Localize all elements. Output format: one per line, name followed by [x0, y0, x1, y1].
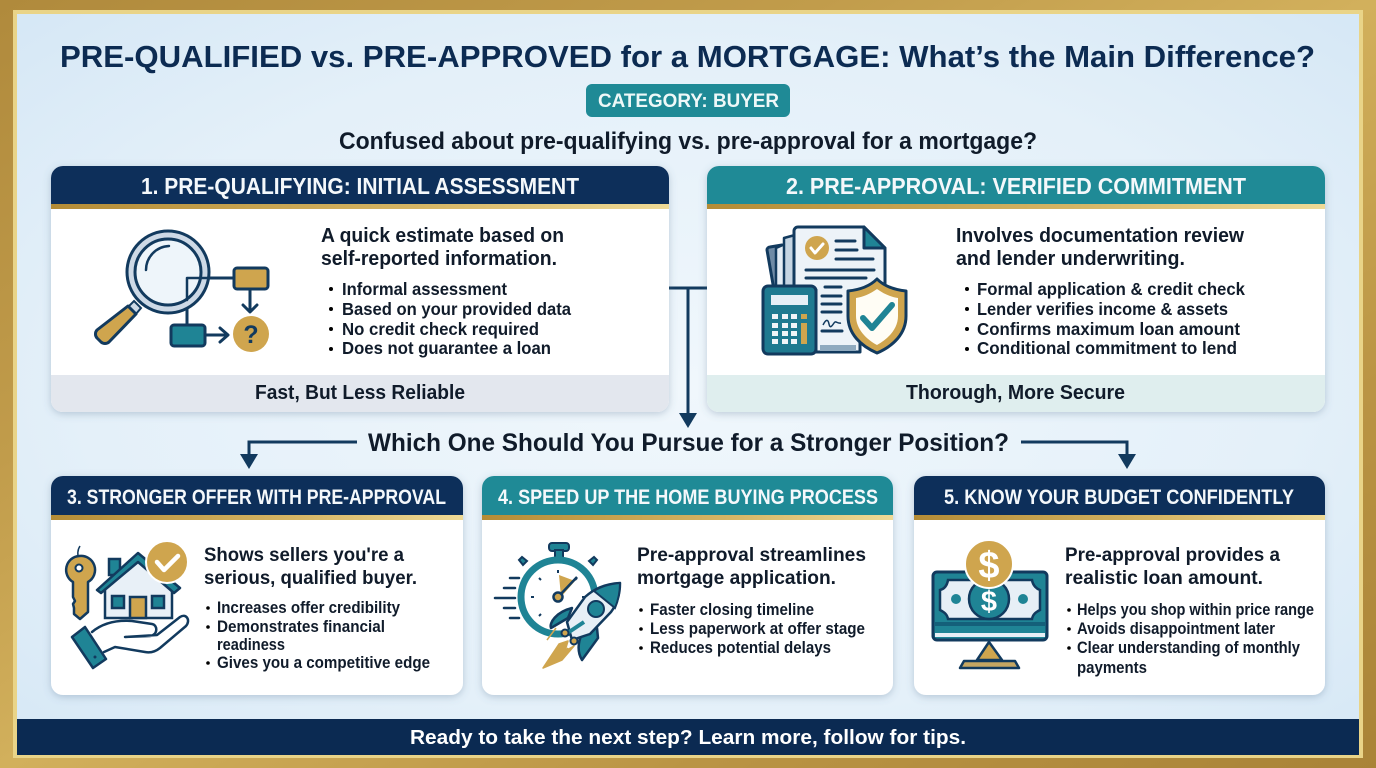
panel 1 footer: Fast, But Less Reliable — [255, 382, 465, 404]
section question: Which One Should You Pursue for a Stronger Position? — [368, 429, 1009, 457]
panel 4 text: Faster closing timeline — [650, 601, 814, 619]
panel 5 text: Avoids disappointment later — [1077, 620, 1276, 638]
icon: money monitor and coin — [933, 540, 1047, 668]
icon: stopwatch and rocket — [495, 543, 620, 668]
panel 3 text — [204, 545, 430, 672]
icon: money monitor and coin: $ — [981, 586, 997, 618]
panel 3 text: Increases offer credibility — [217, 599, 401, 617]
panel 2 text: Conditional commitment to lend — [977, 338, 1237, 358]
icon: key, house and hand — [66, 541, 188, 668]
panel: stronger offer — [51, 476, 463, 695]
arrow: left branch — [240, 442, 357, 469]
title: PRE-QUALIFIED vs. PRE-APPROVED for a MORTGAGE: What’s the Main Difference? — [60, 39, 1315, 74]
panel: know your budget — [914, 476, 1325, 695]
panel 1 header: 1. PRE-QUALIFYING: INITIAL ASSESSMENT — [141, 173, 579, 199]
icon: magnifier with flowchart: ? — [243, 321, 259, 349]
panel 2 footer: Thorough, More Secure — [906, 382, 1125, 404]
icon: documents, calculator and shield — [763, 227, 906, 354]
panel 1 text — [321, 225, 571, 358]
panel 2 text: Confirms maximum loan amount — [977, 319, 1240, 339]
subtitle: Confused about pre-qualifying vs. pre-approval for a mortgage? — [339, 128, 1037, 155]
panel 5 header: 5. KNOW YOUR BUDGET CONFIDENTLY — [944, 486, 1294, 509]
panel 5 text — [1065, 545, 1314, 677]
panel 5 text: realistic loan amount. — [1065, 568, 1263, 589]
panel 1 text: Informal assessment — [342, 279, 507, 299]
panel 5 text: Clear understanding of monthly — [1077, 639, 1301, 657]
panel 1 text: Based on your provided data — [342, 299, 571, 319]
panel 3 text: Gives you a competitive edge — [217, 654, 430, 672]
panel 1 text: No credit check required — [342, 319, 539, 339]
arrow: right branch — [1021, 442, 1136, 469]
panel 5 text: Pre-approval provides a — [1065, 545, 1280, 566]
panel 5 header — [914, 476, 1325, 520]
panel 5 text: payments — [1077, 659, 1147, 677]
panel 1 footer — [51, 375, 669, 412]
panel 2 header: 2. PRE-APPROVAL: VERIFIED COMMITMENT — [786, 173, 1246, 199]
category badge — [586, 84, 790, 117]
icon: money monitor and coin: $ — [978, 545, 1000, 587]
panel 4 text — [637, 545, 866, 657]
panel 3 text: Shows sellers you're a — [204, 545, 404, 566]
panel 4 text: Less paperwork at offer stage — [650, 620, 865, 638]
panel 1 header — [51, 166, 669, 209]
panel 3 text: Demonstrates financial — [217, 618, 385, 636]
panel 2 text: Lender verifies income & assets — [977, 299, 1228, 319]
footer banner: Ready to take the next step? Learn more, follow for tips. — [410, 727, 966, 749]
panel 1 text: Does not guarantee a loan — [342, 338, 551, 358]
panel 4 text: mortgage application. — [637, 568, 836, 589]
panel 2 header — [707, 166, 1325, 209]
icon: magnifier with flowchart — [95, 231, 269, 352]
category badge: CATEGORY: BUYER — [598, 91, 779, 112]
panel 3 text: readiness — [217, 636, 285, 654]
panel: pre-qualifying — [51, 166, 669, 412]
panel 2 text: Formal application & credit check — [977, 279, 1245, 299]
panel 2 text — [956, 225, 1245, 358]
panel 2 footer — [707, 375, 1325, 412]
panel 2 text: Involves documentation review — [956, 225, 1244, 247]
panel 1 text: A quick estimate based on — [321, 225, 564, 247]
panel 5 text: Helps you shop within price range — [1077, 601, 1314, 619]
panel: speed up — [482, 476, 893, 695]
panel 4 text: Reduces potential delays — [650, 639, 831, 657]
panel 3 header: 3. STRONGER OFFER WITH PRE-APPROVAL — [67, 486, 446, 509]
footer banner — [17, 719, 1359, 755]
panel 4 header: 4. SPEED UP THE HOME BUYING PROCESS — [498, 486, 878, 509]
panel 4 header — [482, 476, 893, 520]
panel 4 text: Pre-approval streamlines — [637, 545, 866, 566]
panel 3 header — [51, 476, 463, 520]
panel 1 text: self-reported information. — [321, 248, 557, 270]
panel: pre-approval — [707, 166, 1325, 412]
panel 2 text: and lender underwriting. — [956, 248, 1185, 270]
connector arrow between top panels — [669, 288, 707, 428]
panel 3 text: serious, qualified buyer. — [204, 568, 417, 589]
